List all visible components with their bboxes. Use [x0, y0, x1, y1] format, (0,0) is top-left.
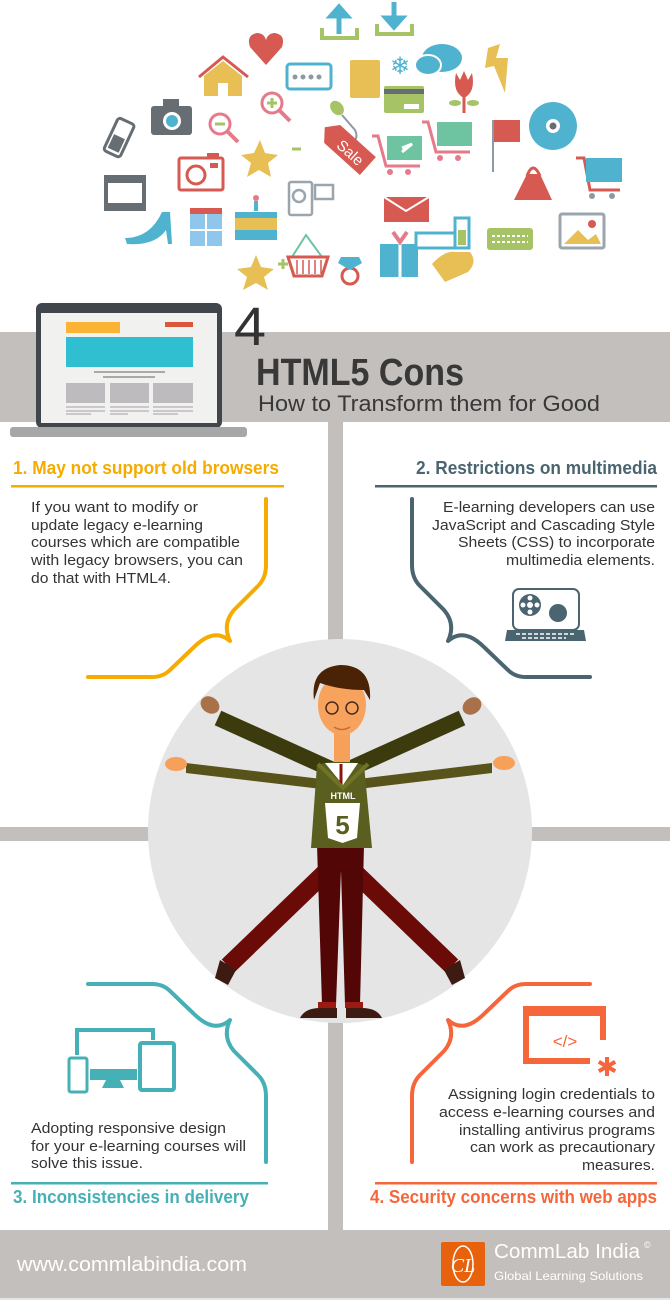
icon: speech bubbles — [415, 44, 462, 75]
text block 2 — [432, 499, 655, 569]
text block 1: If you want to modify or — [31, 499, 198, 516]
text block 2: JavaScript and Cascading Style — [432, 517, 655, 534]
text block 4: access e-learning courses and — [439, 1104, 655, 1121]
logo: Global Learning Solutions — [494, 1269, 643, 1283]
panel 3 content — [11, 984, 268, 1207]
connector teal — [88, 984, 266, 1162]
icon: code window with wrench: ✱ — [596, 1052, 618, 1082]
text block 3: Adopting responsive design — [31, 1120, 226, 1137]
icon: download — [377, 2, 412, 34]
heading 3: 3. Inconsistencies in delivery — [13, 1187, 249, 1207]
center circle — [148, 639, 532, 1023]
title: How to Transform them for Good — [258, 391, 600, 416]
icon: multimedia laptop — [505, 589, 586, 641]
text block 4 — [439, 1086, 656, 1174]
icon: star — [241, 140, 301, 177]
raised arms — [218, 718, 333, 770]
panel: bottom-left — [0, 841, 328, 1230]
text block 4: can work as precautionary — [470, 1139, 656, 1156]
panel 4 content — [370, 984, 657, 1207]
text block 3: for your e-learning courses will — [31, 1138, 246, 1155]
panel 2 content — [375, 458, 658, 677]
text block 2: multimedia elements. — [506, 552, 655, 569]
icon: basket — [288, 235, 328, 276]
logo: CommLab India — [494, 1241, 641, 1263]
heading 1: 1. May not support old browsers — [13, 458, 279, 478]
panel 1 content — [11, 458, 284, 677]
icon: disc — [529, 102, 577, 150]
title: 4 — [234, 297, 266, 357]
icon: magnifier minus — [210, 114, 238, 142]
icon: shoe — [125, 212, 172, 244]
icon: gray camera — [151, 99, 192, 135]
panel: bottom-right — [343, 841, 670, 1230]
icon: keyboard — [487, 228, 533, 250]
icon: sale tag: Sale — [333, 137, 367, 170]
legs spread — [228, 858, 340, 966]
text block 2: Sheets (CSS) to incorporate — [458, 534, 655, 551]
character: HTML5 guy: 5 — [335, 810, 350, 840]
icon: cake — [235, 195, 277, 240]
text block 4: installing antivirus programs — [459, 1122, 655, 1139]
icon cloud — [103, 2, 622, 290]
heading 4: 4. Security concerns with web apps — [370, 1187, 657, 1207]
icon: video camera — [289, 182, 333, 215]
connector yellow — [88, 499, 266, 677]
icon: credit card — [384, 86, 424, 113]
laptop illustration — [10, 303, 247, 437]
icon: flag — [493, 120, 520, 172]
icon: microphone — [327, 98, 356, 140]
torso — [311, 762, 372, 848]
icon: chat box — [287, 64, 331, 89]
icon: picture — [560, 214, 604, 248]
text block 3 — [31, 1120, 246, 1172]
straight legs — [317, 845, 364, 1005]
icon: carts — [372, 136, 422, 175]
icon: film — [104, 175, 146, 211]
text block 1: update legacy e-learning — [31, 517, 203, 534]
logo: © — [644, 1240, 651, 1250]
icon: blue cart — [576, 158, 622, 199]
icon: devices — [69, 1030, 174, 1092]
icon: phone — [103, 117, 135, 158]
icon: gift small — [190, 208, 222, 246]
heading 2: 2. Restrictions on multimedia — [416, 458, 658, 478]
panel: top-left — [0, 422, 328, 827]
icon: gift big — [380, 232, 456, 277]
text block 1: with legacy browsers, you can — [30, 552, 243, 569]
horizontal arms — [186, 763, 330, 790]
title: HTML5 Cons — [256, 352, 464, 394]
connector blue — [412, 499, 590, 677]
icon: magnifier plus — [262, 93, 290, 121]
footer: www.commlabindia.com — [16, 1254, 247, 1276]
character: HTML5 guy: HTML — [330, 791, 356, 801]
text block 2: E-learning developers can use — [443, 499, 655, 516]
connector orange — [412, 984, 590, 1162]
icon: upload — [322, 7, 357, 38]
icon: code window with wrench — [526, 1009, 618, 1082]
icon: battery hand — [432, 218, 474, 282]
text block 1: courses which are compatible — [31, 534, 240, 551]
text block 4: measures. — [582, 1157, 655, 1174]
icon: house — [199, 57, 248, 96]
icon: notebook — [350, 60, 380, 98]
icon: tulip — [449, 71, 479, 113]
title — [234, 297, 600, 416]
logo: CL — [451, 1255, 475, 1277]
icon: envelope — [384, 197, 429, 222]
icon: snowflake: ❄ — [390, 53, 410, 80]
character: HTML5 guy — [165, 665, 515, 1018]
icon: handbag — [514, 168, 552, 200]
icon: red camera — [179, 153, 223, 190]
icon: heart — [249, 33, 283, 65]
gray background band and frame — [0, 332, 670, 1298]
icon: lightning — [485, 44, 508, 93]
icon: ring — [338, 257, 362, 284]
icon: code window with wrench: </> — [553, 1032, 577, 1051]
text block 1 — [30, 499, 243, 587]
icon: star 2 — [237, 255, 288, 290]
panel: top-right — [343, 422, 670, 827]
footer — [16, 1240, 651, 1286]
text block 4: Assigning login credentials to — [448, 1086, 655, 1103]
neck and head — [334, 728, 350, 762]
icon: sale tag — [317, 118, 376, 175]
logo — [441, 1240, 651, 1286]
text block 3: solve this issue. — [31, 1155, 143, 1172]
text block 1: do that with HTML4. — [31, 570, 171, 587]
